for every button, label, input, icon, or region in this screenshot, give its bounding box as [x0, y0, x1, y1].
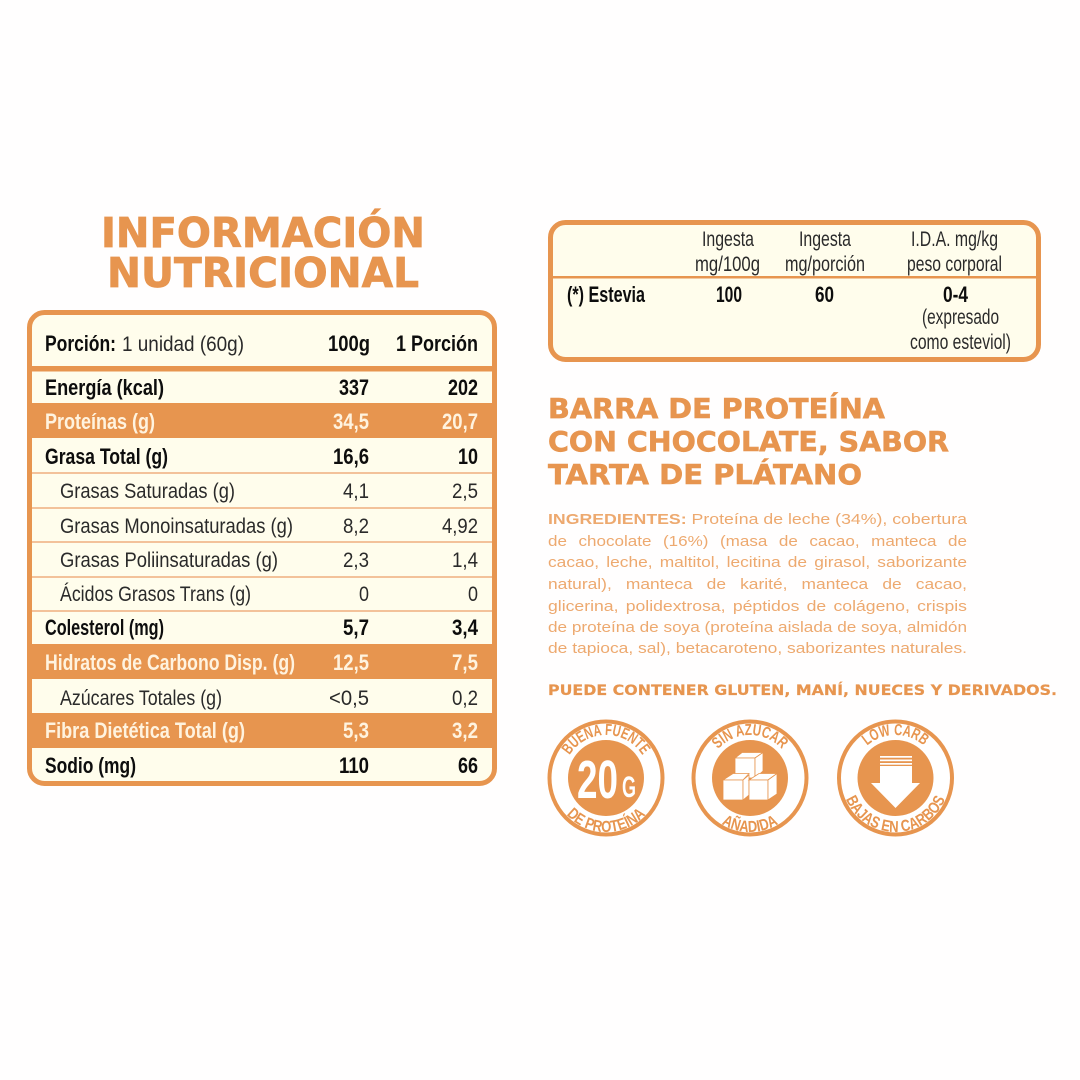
- row separators: [32, 472, 492, 612]
- stevia column headers: [695, 228, 1002, 276]
- product heading: TARTA DE PLÁTANO: [548, 457, 862, 491]
- highlighted row: hidratos: [32, 644, 492, 679]
- stevia row: 0-4: [943, 282, 969, 307]
- row: grasas monoinsaturadas: 8,2: [343, 515, 369, 538]
- stevia column headers: mg/porción: [785, 253, 865, 276]
- title: NUTRICIONAL: [107, 249, 419, 297]
- row: colesterol: 3,4: [452, 615, 479, 640]
- stevia row: [567, 282, 1011, 354]
- row: hidratos de carbono: 7,5: [452, 650, 478, 675]
- badge: 20g protein: G: [622, 771, 636, 804]
- row: hidratos de carbono: Hidratos de Carbono Disp. (g): [45, 650, 295, 675]
- row: proteínas: 34,5: [333, 409, 369, 434]
- table header: [45, 331, 478, 356]
- badge: 20g protein: DE PROTEÍNA: [567, 807, 646, 832]
- title: [101, 209, 425, 297]
- row: azúcares totales: [60, 687, 478, 710]
- icon: sugar cubes: [723, 752, 777, 800]
- badge: low carb: [837, 720, 954, 836]
- header divider: [32, 366, 492, 372]
- row: grasas saturadas: 4,1: [343, 480, 369, 503]
- row: fibra dietética: 5,3: [343, 718, 369, 743]
- panel: stevia table: [550, 222, 1038, 360]
- row: sodio: Sodio (mg): [45, 753, 136, 778]
- row: proteínas: Proteínas (g): [45, 409, 155, 434]
- row: proteínas: 20,7: [442, 409, 478, 434]
- ingredients text: de chocolate (16%) (masa de cacao, manteca de: [548, 533, 967, 550]
- table header: 100g: [328, 331, 370, 356]
- row: sodio: [45, 753, 478, 778]
- table header: Porción:: [45, 331, 116, 356]
- row: sodio: 66: [458, 753, 478, 778]
- row: grasa total: 16,6: [333, 444, 369, 469]
- row: ácidos grasos trans: [60, 583, 478, 606]
- row: energía: 202: [448, 375, 478, 400]
- stevia column headers: mg/100g: [695, 253, 760, 276]
- row: sodio: 110: [339, 753, 369, 778]
- stevia column headers: I.D.A. mg/kg: [911, 228, 998, 251]
- highlighted row: fibra: [32, 713, 492, 748]
- row: grasa total: 10: [458, 444, 478, 469]
- badge: no added sugar: AÑADIDA: [722, 816, 778, 832]
- product heading: CON CHOCOLATE, SABOR: [548, 425, 949, 458]
- badge: 20g protein: BUENA FUENTE: [561, 724, 651, 755]
- row: azúcares totales: 0,2: [452, 687, 478, 710]
- ingredients text: [548, 511, 968, 657]
- row: fibra dietética: 3,2: [452, 718, 478, 743]
- row: grasas saturadas: [60, 480, 478, 503]
- ingredients text: de tapioca, sal), betacaroteno, saborizantes naturales.: [548, 640, 967, 657]
- ingredients text: cacao, leche, maltitol, lecitina de girasol, saborizante: [548, 554, 967, 571]
- table header: 1 Porción: [396, 331, 478, 356]
- row: grasa total: Grasa Total (g): [45, 444, 168, 469]
- row: colesterol: [45, 615, 479, 640]
- row: ácidos grasos trans: 0: [359, 583, 369, 606]
- row: azúcares totales: <0,5: [329, 687, 369, 710]
- stevia column headers: peso corporal: [907, 253, 1002, 276]
- row: ácidos grasos trans: 0: [468, 583, 478, 606]
- badge: 20g protein: 20: [577, 750, 618, 810]
- table header: 1 unidad (60g): [122, 333, 244, 356]
- row: fibra dietética: Fibra Dietética Total (g): [45, 718, 245, 743]
- icon: down arrow: [871, 756, 920, 808]
- badge: no added sugar: SIN AZÚCAR: [712, 724, 788, 749]
- product heading: [548, 391, 949, 491]
- badge: low carb: LOW CARB: [861, 724, 929, 746]
- row: grasas poliinsaturadas: [60, 549, 478, 572]
- row: colesterol: 5,7: [343, 615, 369, 640]
- badge: no added sugar: [692, 720, 808, 836]
- ingredients text: de proteína de soya (proteína aislada de soya, almidón: [548, 619, 967, 636]
- badge: low carb: BAJAS EN CARBOS: [846, 794, 944, 832]
- title: INFORMACIÓN: [101, 209, 425, 257]
- product heading: BARRA DE PROTEÍNA: [548, 391, 885, 425]
- row: hidratos de carbono: 12,5: [333, 650, 369, 675]
- row: grasas saturadas: Grasas Saturadas (g): [60, 480, 235, 503]
- row: grasas saturadas: 2,5: [452, 480, 478, 503]
- ingredients text: natural), manteca de karité, manteca de cacao,: [548, 576, 967, 593]
- stevia row: (expresado: [922, 306, 999, 329]
- stevia row: como esteviol): [910, 331, 1011, 354]
- stevia row: 100: [716, 282, 742, 307]
- row: grasas poliinsaturadas: 1,4: [452, 549, 478, 572]
- stevia column headers: Ingesta: [799, 228, 851, 251]
- allergen warning: PUEDE CONTENER GLUTEN, MANÍ, NUECES Y DERIVADOS.: [548, 682, 1057, 699]
- row: grasa total: [45, 444, 478, 469]
- stevia row: (*) Estevia: [567, 282, 646, 307]
- stevia row: 60: [815, 282, 834, 307]
- row: grasas poliinsaturadas: 2,3: [343, 549, 369, 572]
- highlighted row: proteínas: [32, 403, 492, 438]
- badge: 20g protein: [548, 720, 664, 836]
- row: energía: 337: [339, 375, 369, 400]
- row: ácidos grasos trans: Ácidos Grasos Trans (g): [60, 583, 251, 606]
- panel: nutrition table: [30, 312, 494, 784]
- row: azúcares totales: Azúcares Totales (g): [60, 687, 222, 710]
- row: fibra dietética: [45, 718, 478, 743]
- ingredients text: INGREDIENTES: Proteína de leche (34%), cobertura: [548, 511, 968, 528]
- stevia column headers: Ingesta: [702, 228, 754, 251]
- row: energía: [45, 375, 478, 400]
- row: grasas poliinsaturadas: Grasas Poliinsaturadas (g): [60, 549, 278, 572]
- row: energía: Energía (kcal): [45, 375, 164, 400]
- row: colesterol: Colesterol (mg): [45, 615, 164, 640]
- row: grasas monoinsaturadas: [60, 515, 478, 538]
- row: proteínas: [45, 409, 478, 434]
- row: grasas monoinsaturadas: Grasas Monoinsaturadas (g): [60, 515, 293, 538]
- ingredients text: glicerina, polidextrosa, péptidos de colágeno, crispis: [548, 598, 967, 615]
- row: grasas monoinsaturadas: 4,92: [442, 515, 478, 538]
